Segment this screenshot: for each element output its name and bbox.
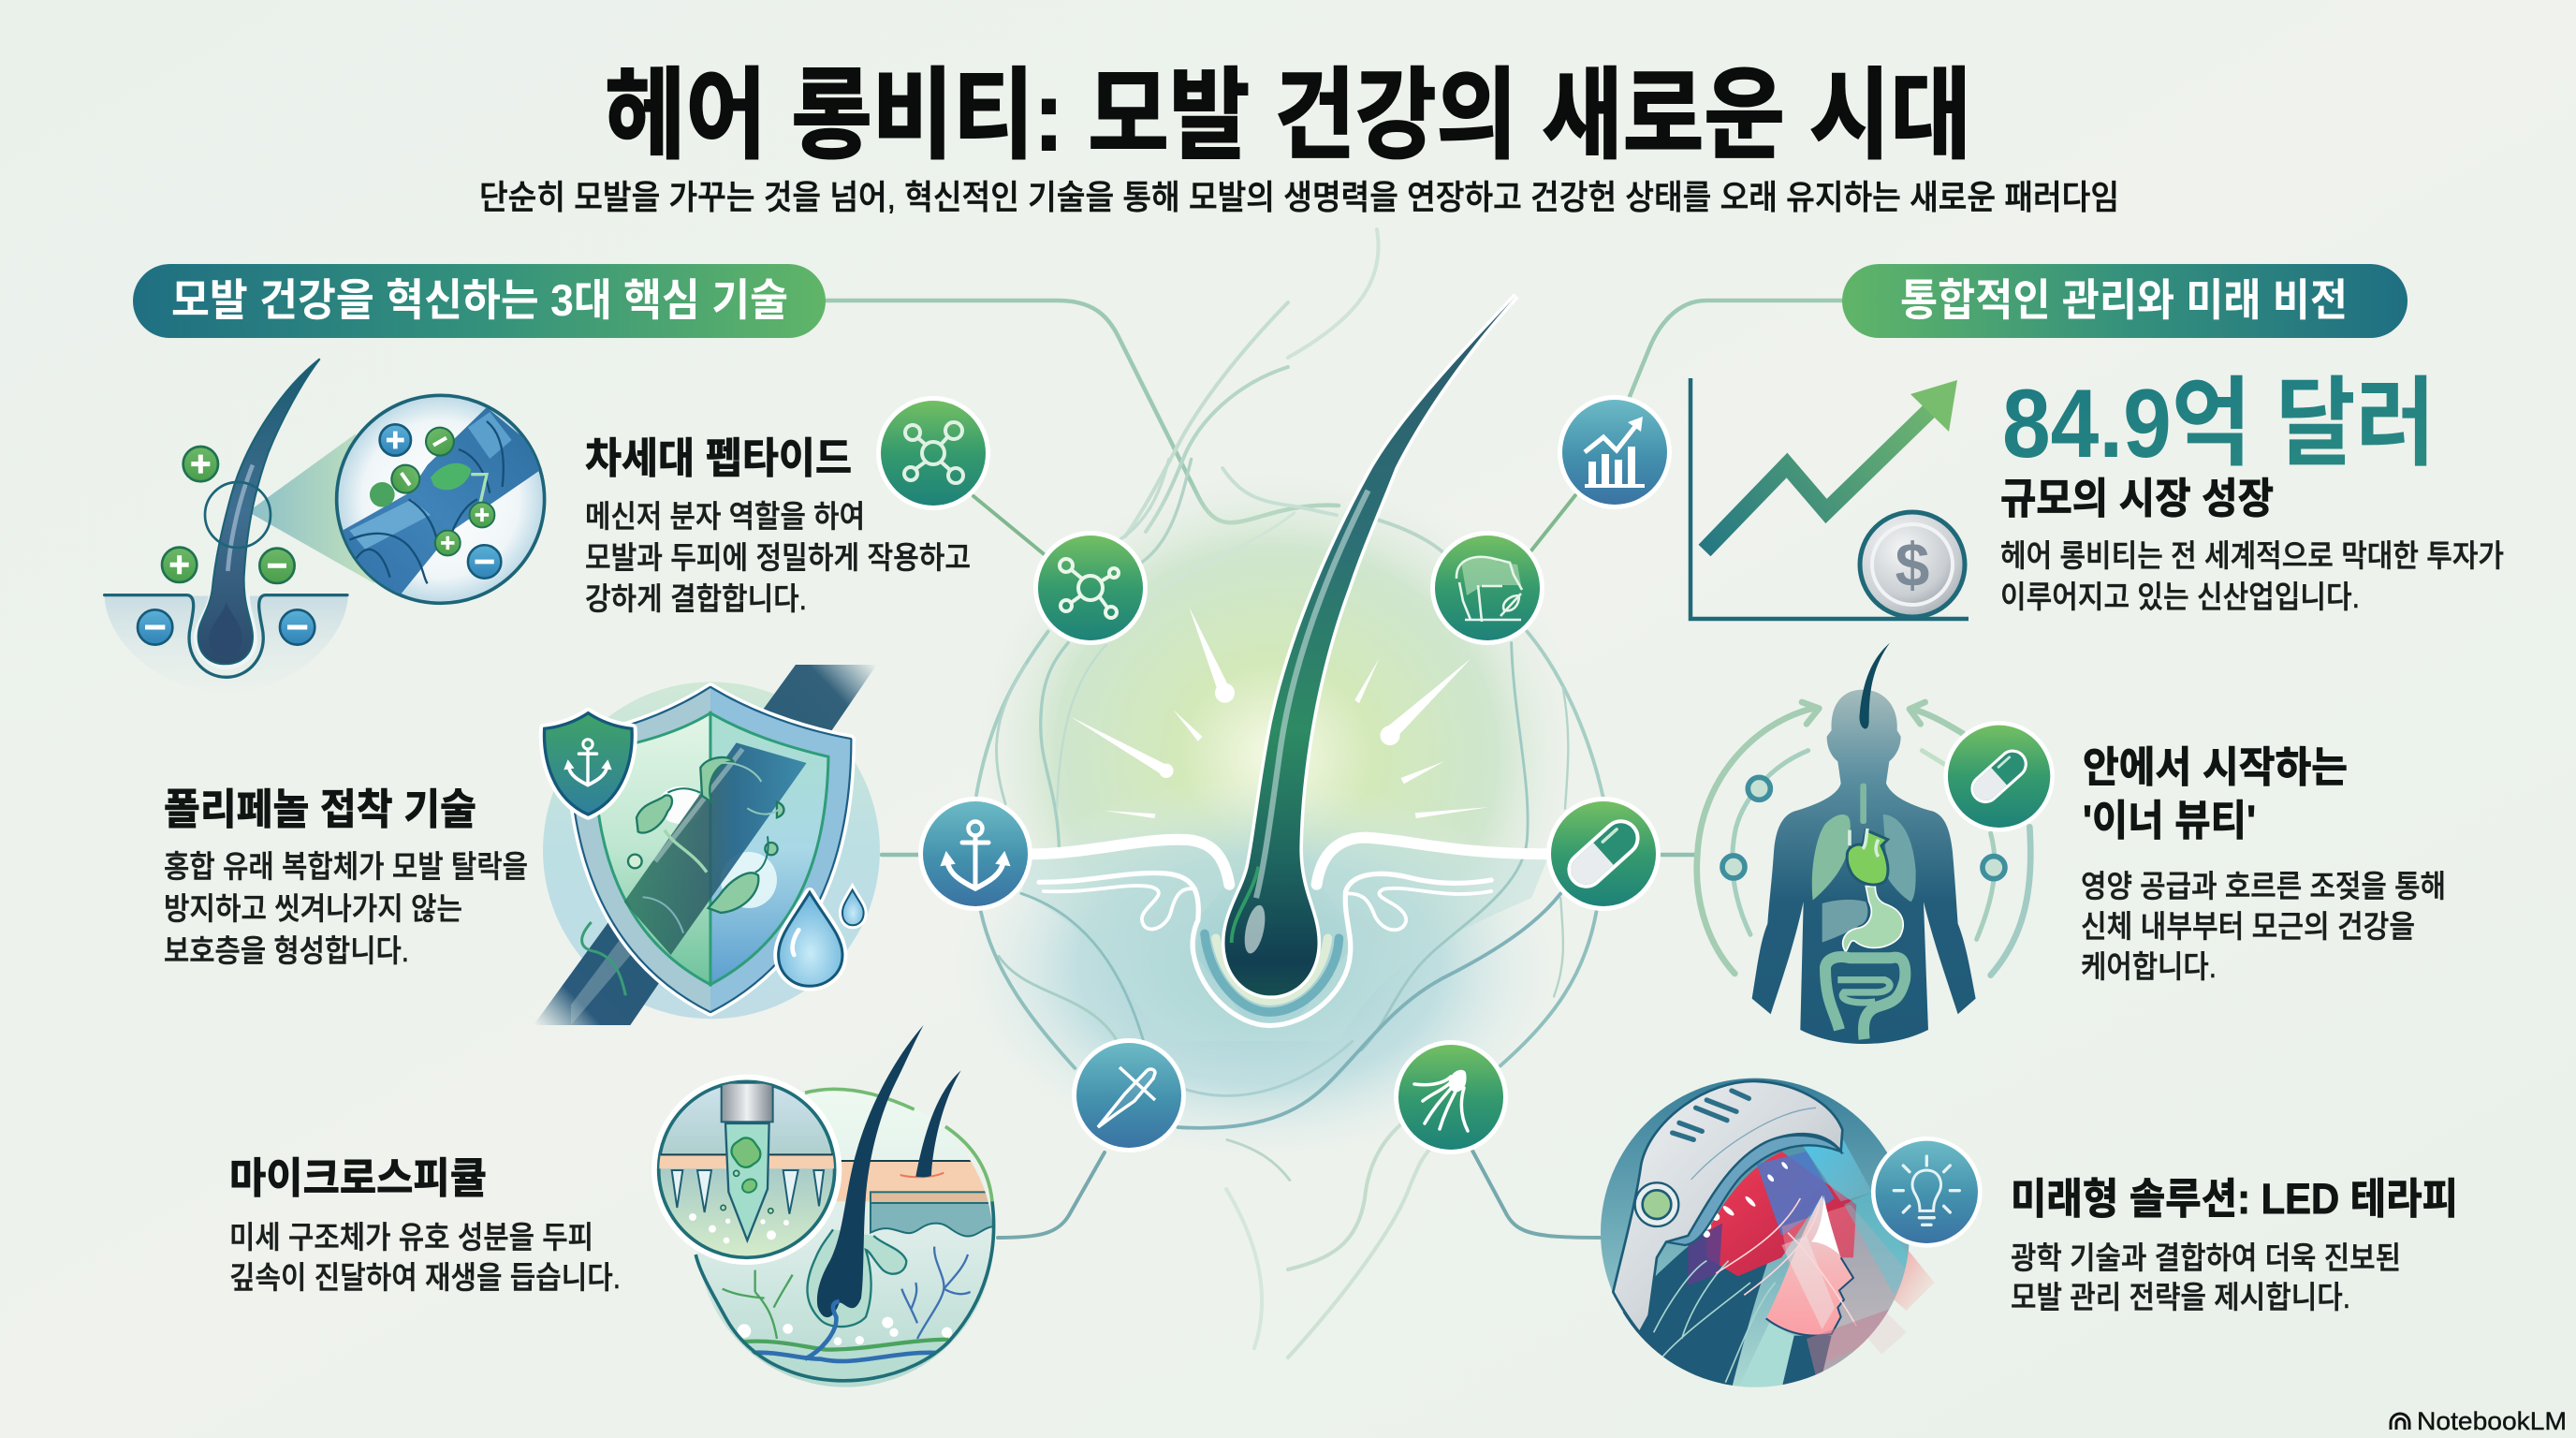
- illustration: inner beauty body: [1697, 643, 2055, 1044]
- heading pill: integrated care and vision: 통합적인 관리와 미래 비전: [1900, 275, 2348, 325]
- stat: market size: 헤어 롱비티는 전 세계적으로 막대한 투자가: [2000, 538, 2504, 573]
- text: microspicule: 마이크로스피큘: [229, 1154, 487, 1202]
- text: next-gen peptide: 강하게 결합합니다.: [585, 581, 807, 616]
- illustration: LED therapy helmet: [1601, 1078, 1983, 1388]
- node: head icon: [1430, 531, 1544, 645]
- skin curve: [1032, 838, 1549, 1025]
- heading pill: 3 core technologies: 모발 건강을 혁신하는 3대 핵심 기술: [171, 275, 788, 325]
- text: polyphenol adhesion: 홍합 유래 복합체가 모발 탈락을: [164, 849, 528, 884]
- text: LED therapy: 광학 기술과 결합하여 더욱 진보된: [2011, 1240, 2401, 1275]
- text: LED therapy: [2011, 1175, 2458, 1314]
- node: hair root icon: [1394, 1040, 1508, 1154]
- sparkles: [1070, 607, 1489, 818]
- heading pill: integrated care and vision: [1842, 264, 2408, 338]
- connector lines: [826, 229, 1842, 1357]
- magnified hair: [343, 407, 539, 594]
- subtitle: 단순히 모발을 가꾸는 것을 넘어, 혁신적인 기술을 통해 모발의 생명력을 연장하고 건강헌 상태를 오래 유지하는 새로운 패러다임: [479, 178, 2119, 216]
- main hair shaft: [1225, 296, 1516, 995]
- text: inner beauty: [2081, 743, 2446, 984]
- text: inner beauty: 신체 내부부터 모근의 건강을: [2081, 909, 2415, 944]
- stat: market size: 이루어지고 있는 신산업입니다.: [2000, 580, 2360, 614]
- node: growth chart icon: [1558, 395, 1672, 509]
- illustration: polyphenol shield: [534, 665, 880, 1025]
- text: inner beauty: '이너 뷰티': [2083, 797, 2256, 844]
- text: inner beauty: 영양 공급과 호르른 조젖을 통해: [2081, 869, 2446, 903]
- node: capsule: [1546, 797, 1661, 911]
- text: next-gen peptide: 모발과 두피에 정밀하게 작용하고: [585, 540, 971, 575]
- circuit lines around follicle: [976, 459, 1603, 1180]
- text: microspicule: 미세 구조체가 유호 성분을 두피: [229, 1220, 593, 1255]
- node: peptide molecule: [876, 396, 990, 510]
- central hair follicle illustration: [954, 296, 1603, 1180]
- title: 헤어 롱비티: 모발 건강의 새로운 시대: [605, 61, 1971, 171]
- text: LED therapy: 모발 관리 전략을 제시합니다.: [2011, 1280, 2350, 1314]
- chart: market growth: [1690, 378, 1969, 619]
- stat: market size: [2000, 370, 2504, 614]
- text: inner beauty: 케어합니다.: [2081, 949, 2217, 984]
- text: polyphenol adhesion: 보호층을 형성합니다.: [164, 933, 409, 968]
- chart: market growth: $: [1895, 530, 1929, 599]
- node: microneedle: [1072, 1038, 1186, 1152]
- stat: market size: 84.9억 달러: [2002, 370, 2436, 478]
- text: polyphenol adhesion: 폴리페놀 접착 기술: [164, 785, 476, 833]
- text: LED therapy: 미래형 솔루션: LED 테라피: [2011, 1175, 2458, 1223]
- text: microspicule: 깊속이 진달하여 재생을 듭습니다.: [229, 1260, 621, 1295]
- text: next-gen peptide: [585, 434, 971, 616]
- node: anchor: [918, 797, 1032, 911]
- illustration: peptide hair magnifier: [105, 359, 552, 693]
- heading pill: 3 core technologies: [133, 264, 826, 338]
- text: next-gen peptide: 차세대 펩타이드: [585, 434, 852, 482]
- illustration: microspicule skin cross-section: [651, 1025, 999, 1388]
- text: next-gen peptide: 메신저 분자 역할을 하여: [585, 499, 865, 534]
- node: molecule (center ring): [1033, 531, 1148, 645]
- text: polyphenol adhesion: 방지하고 씻겨나가지 않는: [164, 891, 462, 926]
- text: microspicule: [229, 1154, 621, 1295]
- stat: market size: 규모의 시장 성장: [2000, 475, 2274, 522]
- NotebookLM watermark: NotebookLM: [2417, 1407, 2567, 1435]
- text: inner beauty: 안에서 시작하는: [2083, 743, 2348, 791]
- text: polyphenol adhesion: [164, 785, 528, 968]
